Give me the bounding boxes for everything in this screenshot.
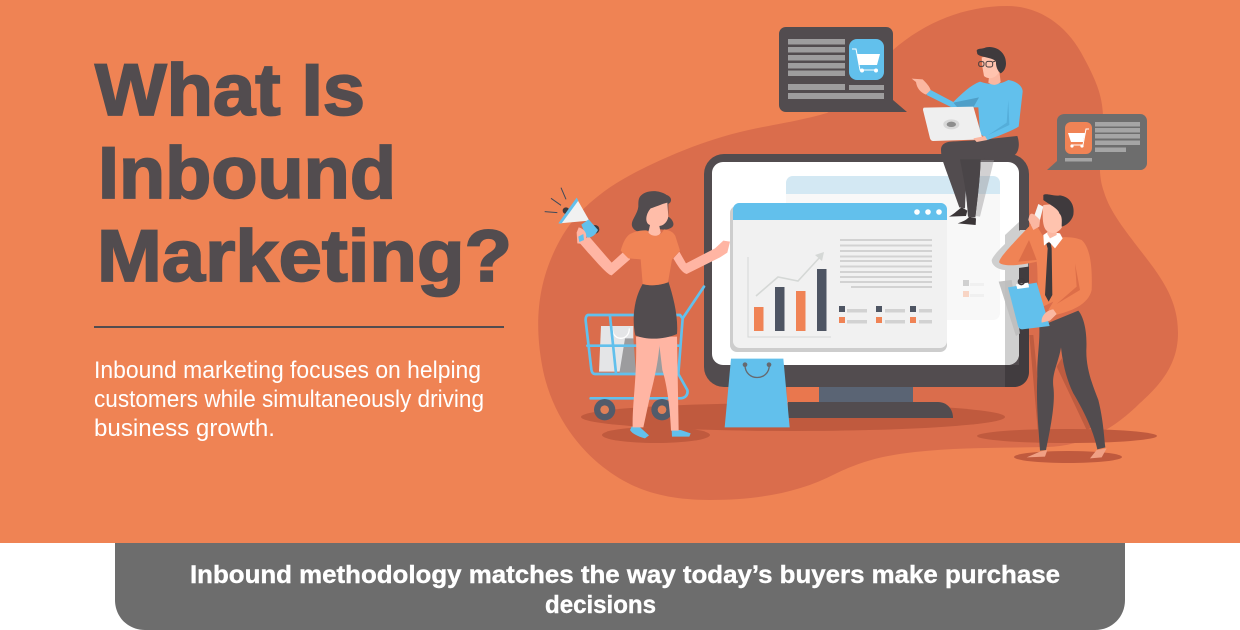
monitor stand [787,387,820,403]
monitor screen [712,162,1019,365]
cart wheels [594,399,615,420]
ground shadows [581,403,1157,463]
figure: man with laptop [912,47,1023,225]
main dashboard window [730,203,947,352]
figure: man with clipboard [992,222,1107,458]
shopping bag [725,359,790,427]
head of man on phone [1028,194,1074,233]
hair [977,47,1006,73]
neck [988,72,1001,85]
leg shadow [960,160,994,217]
face and neck [646,203,668,237]
megaphone [545,188,599,244]
hand on laptop [973,136,987,142]
background blob [538,6,1178,500]
collar [1043,232,1063,248]
title: Inbound [98,133,396,214]
methodology banner: Inbound methodology matches the way today’s buyers make purchase [190,561,1060,589]
monitor frame [704,154,1029,387]
clipboard [999,280,1020,336]
intro paragraph: business growth. [94,415,275,442]
trousers [1037,311,1105,451]
chart legend [839,306,932,324]
phone [1033,204,1043,223]
speech bubble: orange cart [1047,114,1147,170]
shopping cart [586,287,704,420]
back panel [786,176,1000,320]
figure: woman with megaphone [545,188,730,438]
title: What Is [95,50,365,131]
face [982,55,999,78]
neck [1047,227,1057,238]
text lines [840,239,932,288]
intro paragraph: Inbound marketing focuses on helping [94,357,481,384]
title: Marketing? [97,216,512,297]
intro paragraph: customers while simultaneously driving [94,386,484,413]
feet [1027,450,1047,457]
title [95,50,512,297]
icon: shopping cart blue [849,39,884,80]
shirt [999,222,1092,315]
hand pointing [912,79,931,95]
window dots [914,209,942,215]
divider rule [94,326,504,328]
laptop [923,107,983,141]
shadow on screen [992,230,1028,270]
speech bubble: blue cart [779,27,907,112]
glasses [979,61,997,67]
bar chart [748,252,831,337]
shoes [630,427,649,438]
icon: shopping cart orange [1065,122,1092,154]
shoes [949,207,967,217]
legs [633,337,660,427]
tie [1045,243,1052,302]
pants [941,136,1019,217]
hair [632,191,673,232]
arms [580,236,630,275]
sweater [927,80,1023,140]
intro paragraph [94,357,484,442]
skirt [634,282,677,339]
hand on clipboard [1042,309,1057,323]
methodology banner: decisions [545,591,656,619]
blouse [621,229,680,285]
methodology banner [115,543,1125,630]
monitor [704,154,1029,418]
